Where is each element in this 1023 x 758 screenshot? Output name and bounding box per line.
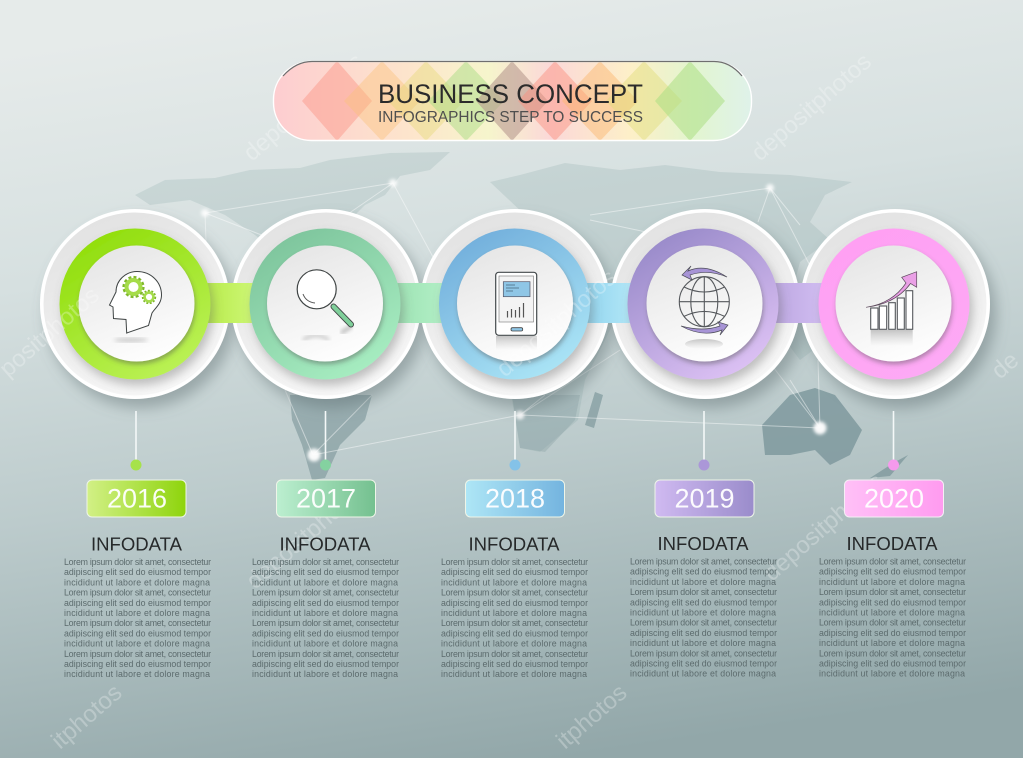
text block 2019: adipiscing elit sed do eiusmod tempor	[630, 597, 777, 607]
text block 2020: Lorem ipsum dolor sit amet, consectetur	[819, 618, 966, 628]
text block 2020: incididunt ut labore et dolore magna	[819, 608, 965, 618]
text block 2016: incididunt ut labore et dolore magna	[64, 639, 210, 649]
coloured rings	[60, 228, 970, 380]
text block 2017: incididunt ut labore et dolore magna	[252, 608, 398, 618]
text block 2016: adipiscing elit sed do eiusmod tempor	[64, 598, 211, 608]
text block 2017: incididunt ut labore et dolore magna	[252, 639, 398, 649]
text block 2017	[252, 534, 399, 679]
year badge 2016	[87, 480, 186, 517]
stems and dots	[130, 411, 899, 470]
world map	[135, 152, 908, 480]
icon: tablet with chart	[496, 272, 537, 350]
icon: rising bar chart	[866, 272, 917, 346]
text block 2020: adipiscing elit sed do eiusmod tempor	[819, 567, 966, 577]
text block 2018: Lorem ipsum dolor sit amet, consectetur	[441, 588, 588, 598]
text block 2019: adipiscing elit sed do eiusmod tempor	[630, 658, 777, 668]
title banner	[273, 61, 752, 141]
text block 2016: Lorem ipsum dolor sit amet, consectetur	[64, 618, 211, 628]
watermarks: depositphotos	[491, 264, 622, 383]
watermarks: depositphotos	[241, 476, 372, 595]
network lines	[201, 179, 826, 462]
text block 2017: adipiscing elit sed do eiusmod tempor	[252, 598, 399, 608]
text block 2016: incididunt ut labore et dolore magna	[64, 577, 210, 587]
text block 2019: adipiscing elit sed do eiusmod tempor	[630, 567, 777, 577]
text block 2016: incididunt ut labore et dolore magna	[64, 608, 210, 618]
watermarks: itphotos	[46, 679, 127, 755]
text block 2020: adipiscing elit sed do eiusmod tempor	[819, 597, 966, 607]
title: BUSINESS CONCEPT	[378, 79, 643, 109]
text block 2019: incididunt ut labore et dolore magna	[630, 577, 776, 587]
outer discs	[40, 209, 990, 399]
text block 2017: adipiscing elit sed do eiusmod tempor	[252, 659, 399, 669]
text block 2016: adipiscing elit sed do eiusmod tempor	[64, 567, 211, 577]
watermarks: depositphotos	[746, 48, 877, 167]
icon: magnifying glass	[297, 270, 352, 340]
year badge 2018: 2018	[485, 484, 545, 514]
text block 2016: adipiscing elit sed do eiusmod tempor	[64, 659, 211, 669]
text block 2017: Lorem ipsum dolor sit amet, consectetur	[252, 649, 399, 659]
year badge 2018	[466, 480, 564, 517]
text block 2019	[630, 534, 777, 679]
text block 2017: adipiscing elit sed do eiusmod tempor	[252, 567, 399, 577]
text block 2020: Lorem ipsum dolor sit amet, consectetur	[819, 556, 966, 566]
year badge 2019: 2019	[674, 484, 735, 514]
year badge 2017	[276, 480, 376, 517]
text block 2018: adipiscing elit sed do eiusmod tempor	[441, 628, 588, 638]
year badge 2019	[655, 480, 754, 517]
icon: globe with arrows	[679, 266, 729, 349]
text block 2017: Lorem ipsum dolor sit amet, consectetur	[252, 557, 399, 567]
text block 2019: adipiscing elit sed do eiusmod tempor	[630, 628, 777, 638]
watermarks: depositphotos	[758, 468, 889, 587]
text block 2018: adipiscing elit sed do eiusmod tempor	[441, 598, 588, 608]
text block 2018: adipiscing elit sed do eiusmod tempor	[441, 659, 588, 669]
text block 2016: adipiscing elit sed do eiusmod tempor	[64, 628, 211, 638]
year badge 2020: 2020	[864, 484, 924, 514]
watermarks: de	[986, 347, 1023, 385]
text block 2019: Lorem ipsum dolor sit amet, consectetur	[630, 648, 777, 658]
text block 2020: INFODATA	[846, 534, 938, 554]
text block 2018: incididunt ut labore et dolore magna	[441, 608, 587, 618]
text block 2020: Lorem ipsum dolor sit amet, consectetur	[819, 587, 966, 597]
text block 2019: incididunt ut labore et dolore magna	[630, 638, 776, 648]
banner diamonds	[302, 61, 725, 141]
text block 2019: incididunt ut labore et dolore magna	[630, 669, 776, 679]
year badge 2016: 2016	[107, 484, 167, 514]
text block 2020: adipiscing elit sed do eiusmod tempor	[819, 628, 966, 638]
connectors between steps	[200, 283, 828, 323]
text block 2016	[64, 534, 211, 679]
text block 2018: incididunt ut labore et dolore magna	[441, 639, 587, 649]
text block 2018: incididunt ut labore et dolore magna	[441, 669, 587, 679]
text block 2016: incididunt ut labore et dolore magna	[64, 669, 210, 679]
text block 2018: adipiscing elit sed do eiusmod tempor	[441, 567, 588, 577]
text block 2019: Lorem ipsum dolor sit amet, consectetur	[630, 556, 777, 566]
text block 2017: Lorem ipsum dolor sit amet, consectetur	[252, 618, 399, 628]
text block 2017: incididunt ut labore et dolore magna	[252, 577, 398, 587]
text block 2018: Lorem ipsum dolor sit amet, consectetur	[441, 557, 588, 567]
text block 2019: Lorem ipsum dolor sit amet, consectetur	[630, 618, 777, 628]
year badge 2017: 2017	[296, 484, 356, 514]
watermarks: depositphotos	[238, 48, 369, 167]
text block 2019: INFODATA	[658, 534, 748, 554]
text block 2017: adipiscing elit sed do eiusmod tempor	[252, 628, 399, 638]
text block 2018	[441, 534, 588, 679]
subtitle: INFOGRAPHICS STEP TO SUCCESS	[378, 109, 643, 126]
text block 2016: Lorem ipsum dolor sit amet, consectetur	[64, 588, 211, 598]
text block 2018: INFODATA	[468, 534, 560, 554]
text block 2016: INFODATA	[91, 534, 182, 554]
text block 2016: Lorem ipsum dolor sit amet, consectetur	[64, 649, 211, 659]
text block 2020: incididunt ut labore et dolore magna	[819, 577, 965, 587]
text block 2017: INFODATA	[280, 534, 370, 554]
text block 2019: incididunt ut labore et dolore magna	[630, 608, 776, 618]
watermarks: itphotos	[551, 679, 632, 755]
year badge 2020	[844, 480, 944, 517]
text block 2020: adipiscing elit sed do eiusmod tempor	[819, 658, 966, 668]
text block 2020: incididunt ut labore et dolore magna	[819, 669, 965, 679]
text block 2020: Lorem ipsum dolor sit amet, consectetur	[819, 648, 966, 658]
text block 2020	[819, 534, 966, 679]
text block 2017: incididunt ut labore et dolore magna	[252, 669, 398, 679]
text block 2018: incididunt ut labore et dolore magna	[441, 577, 587, 587]
text block 2019: Lorem ipsum dolor sit amet, consectetur	[630, 587, 777, 597]
text block 2018: Lorem ipsum dolor sit amet, consectetur	[441, 618, 588, 628]
text block 2018: Lorem ipsum dolor sit amet, consectetur	[441, 649, 588, 659]
text block 2016: Lorem ipsum dolor sit amet, consectetur	[64, 557, 211, 567]
text block 2017: Lorem ipsum dolor sit amet, consectetur	[252, 588, 399, 598]
text block 2020: incididunt ut labore et dolore magna	[819, 638, 965, 648]
inner discs	[78, 246, 952, 362]
icon: head with gears	[110, 272, 162, 342]
